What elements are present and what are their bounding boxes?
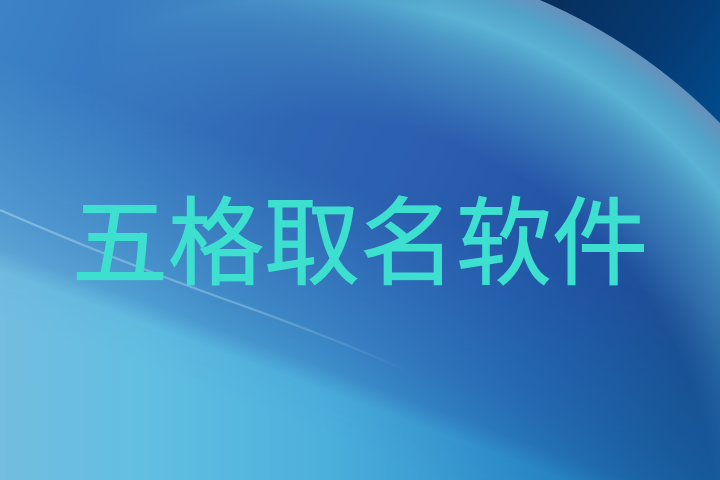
title: 五格取名软件: [72, 191, 648, 298]
